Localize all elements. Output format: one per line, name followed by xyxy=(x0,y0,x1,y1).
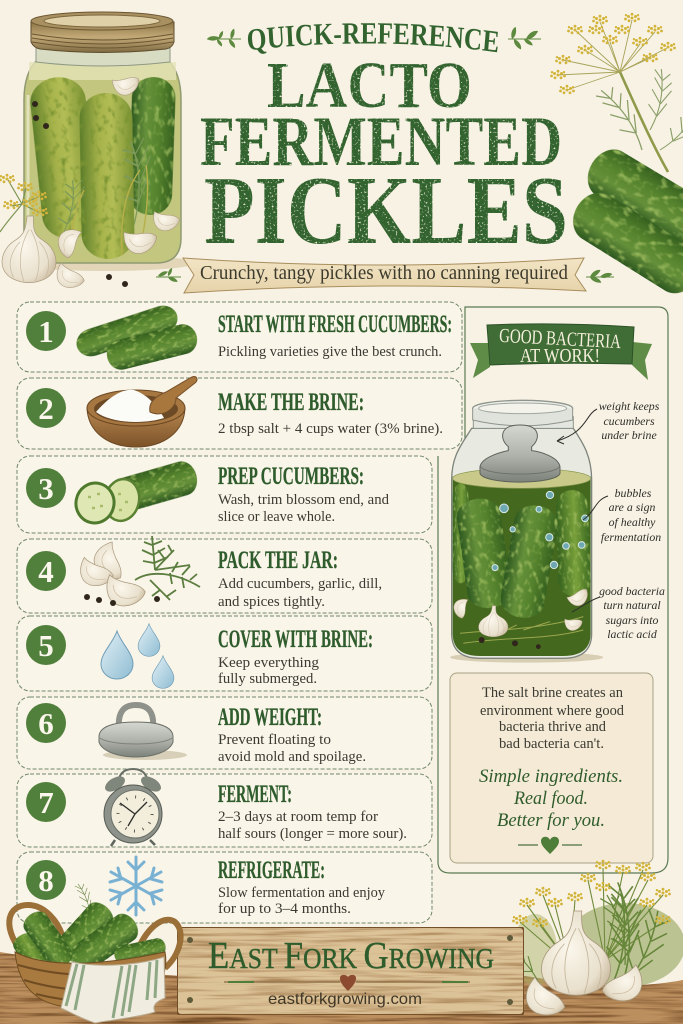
callout: weight: under brine xyxy=(601,428,657,442)
step 1: 1 xyxy=(38,314,54,349)
heart ornament xyxy=(518,837,582,854)
note box: bad bacteria can't. xyxy=(499,736,604,752)
note box: Real food. xyxy=(513,788,588,809)
step 2: MAKE THE BRINE: xyxy=(218,389,364,416)
note box: Simple ingredients. xyxy=(479,766,623,787)
callout: good bacteria: lactic acid xyxy=(607,627,657,641)
step 8 xyxy=(17,852,432,923)
step 3 xyxy=(17,456,432,533)
callout: bubbles: are a sign xyxy=(609,500,655,514)
sign divider xyxy=(224,975,470,991)
icon: alarm clock xyxy=(102,769,164,846)
callout: good bacteria: turn natural xyxy=(603,598,661,612)
icon: weight xyxy=(99,705,187,760)
step 5 xyxy=(17,616,432,691)
callout: bubbles: bubbles xyxy=(615,486,652,500)
icon: salt bowl xyxy=(87,377,197,447)
wood table xyxy=(0,952,683,1024)
subtitle ribbon xyxy=(156,258,614,293)
kicker leaf ornament left xyxy=(207,28,241,49)
step 3: 3 xyxy=(38,471,54,506)
panel: good bacteria at work xyxy=(438,307,668,873)
banner: AT WORK! xyxy=(520,345,600,367)
panel: steps xyxy=(17,302,462,923)
step 8: for up to 3–4 months. xyxy=(218,901,351,917)
step 1: Pickling varieties give the best crunch. xyxy=(218,344,442,360)
callout: weight: cucumbers xyxy=(603,414,655,428)
note box: environment where good xyxy=(480,703,625,719)
illustration: pickle jar with lid xyxy=(15,12,195,271)
step 7: half sours (longer = more sour). xyxy=(218,826,407,842)
title: pickles: PICKLES xyxy=(204,157,568,265)
sign: east fork growing xyxy=(177,927,524,1015)
step 4: PACK THE JAR: xyxy=(218,547,338,574)
step 7: FERMENT: xyxy=(218,781,292,808)
callout: good bacteria: sugars into xyxy=(606,613,658,627)
note box: Better for you. xyxy=(497,810,605,831)
step 4 xyxy=(17,536,432,613)
step 4: 4 xyxy=(38,554,54,589)
callout: bubbles: fermentation xyxy=(601,530,661,544)
step 7: 2–3 days at room temp for xyxy=(218,809,378,825)
illustration: fermentation jar xyxy=(450,400,603,663)
sign url: eastforkgrowing.com xyxy=(268,991,422,1008)
step 2 xyxy=(17,377,462,449)
step 8: 8 xyxy=(38,863,54,898)
callout: bubbles xyxy=(583,486,661,544)
step 1: START WITH FRESH CUCUMBERS: xyxy=(218,311,452,338)
step 1 xyxy=(17,302,462,373)
banner xyxy=(470,324,652,380)
step 3: slice or leave whole. xyxy=(218,509,335,525)
step 6 xyxy=(17,697,432,769)
title block xyxy=(200,23,568,265)
step 6: avoid mold and spoilage. xyxy=(218,749,366,765)
step 6: 6 xyxy=(38,706,54,741)
step 4: and spices tightly. xyxy=(218,594,325,610)
icon: garlic and dill xyxy=(79,536,200,609)
icon: cucumbers xyxy=(73,302,200,373)
illustration: left dill sprig xyxy=(0,174,48,232)
step 2: 2 tbsp salt + 4 cups water (3% brine). xyxy=(218,421,443,437)
illustration: dill umbel top right xyxy=(550,13,683,172)
step 6: Prevent floating to xyxy=(218,732,331,748)
kicker leaf ornament right xyxy=(508,26,541,51)
step 7: 7 xyxy=(38,785,54,820)
illustration: dill bush xyxy=(488,860,683,990)
step 5: fully submerged. xyxy=(218,671,317,687)
illustration: pickle basket xyxy=(9,880,181,1023)
step 4: Add cucumbers, garlic, dill, xyxy=(218,576,382,592)
note box: The salt brine creates an xyxy=(482,685,624,701)
step 5: COVER WITH BRINE: xyxy=(218,626,373,653)
step 3: Wash, trim blossom end, and xyxy=(218,492,389,508)
callout: good bacteria: good bacteria xyxy=(599,584,665,598)
step 5: 5 xyxy=(38,628,54,663)
tea towel xyxy=(61,957,165,1023)
title: fermented: FERMENTED xyxy=(200,103,562,181)
sign name: EAST FORK GROWING xyxy=(208,935,494,977)
callout: good bacteria xyxy=(572,584,665,641)
step 8: Slow fermentation and enjoy xyxy=(218,885,385,901)
callout: weight xyxy=(557,399,660,444)
callout: bubbles: of healthy xyxy=(609,515,656,529)
step 7 xyxy=(17,769,432,847)
step 8: REFRIGERATE: xyxy=(218,857,325,884)
illustration: garlic bulb and peppercorns xyxy=(2,216,128,288)
callout: weight: weight keeps xyxy=(599,399,660,413)
illustration: two cucumbers top right xyxy=(564,141,683,302)
icon: snowflake xyxy=(110,857,162,915)
note box xyxy=(450,673,653,863)
step 3: PREP CUCUMBERS: xyxy=(218,463,364,490)
step 2: 2 xyxy=(38,391,54,426)
step 6: ADD WEIGHT: xyxy=(218,704,322,731)
illustration: large garlic xyxy=(524,911,642,1018)
kicker: quick-reference: QUICK-REFERENCE xyxy=(248,23,498,54)
subtitle text: Crunchy, tangy pickles with no canning required xyxy=(200,262,568,284)
title: lacto: LACTO xyxy=(267,49,472,122)
icon: sliced cucumber xyxy=(72,458,201,527)
banner text: GOOD BACTERIA xyxy=(499,325,622,353)
note box: bacteria thrive and xyxy=(499,719,607,735)
ribbon leaves xyxy=(156,267,614,285)
step 5: Keep everything xyxy=(218,655,320,671)
icon: water drops xyxy=(101,624,174,688)
